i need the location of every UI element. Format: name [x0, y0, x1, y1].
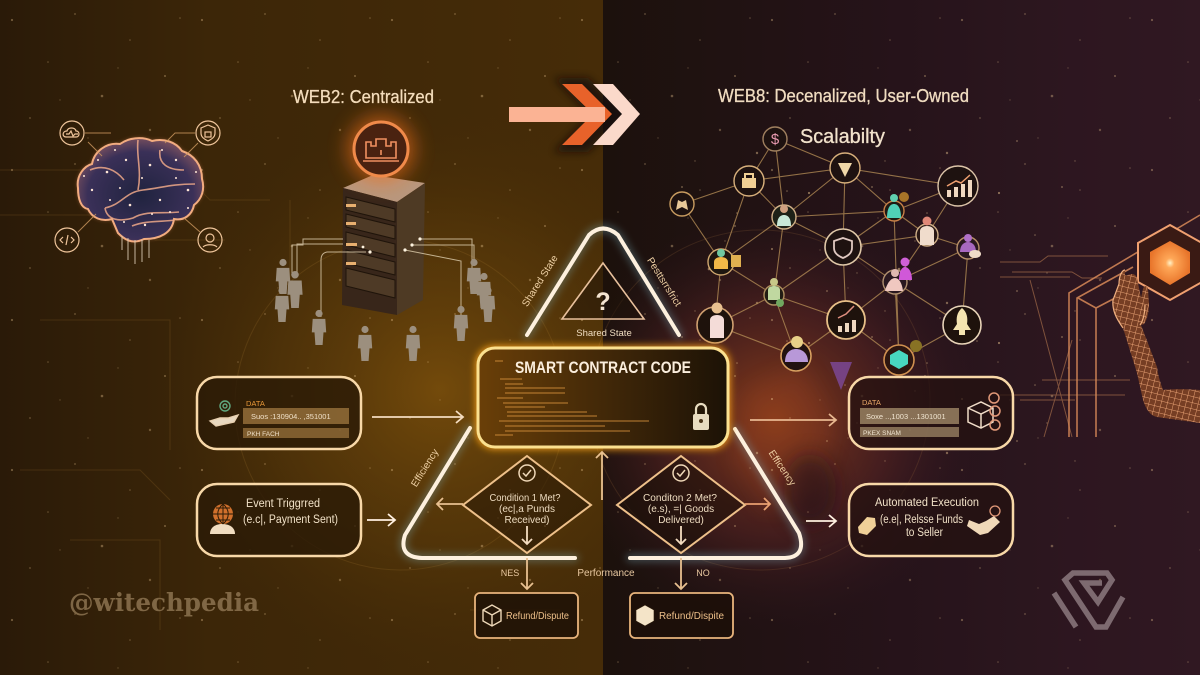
node: user lavender [781, 336, 811, 371]
illustration: central server rack [342, 175, 425, 315]
icon: hand with coin [210, 401, 238, 426]
illustration: wireframe arm and hexagon [1000, 215, 1200, 437]
node: user violet [957, 234, 981, 259]
panel: smart contract code [476, 346, 730, 449]
icon: shield lock [196, 121, 220, 145]
icon: globe user [210, 504, 235, 534]
panel: data right [849, 377, 1013, 449]
text: to seller: to Seller [906, 527, 943, 539]
watermark: handle: @witechpedia [69, 588, 259, 617]
node: currency: $ [771, 131, 780, 148]
text: refund: Refund/Dispute [506, 611, 569, 622]
field: hash [243, 428, 349, 438]
icon: gear [198, 228, 222, 252]
node: user teal [772, 205, 796, 229]
title: web3: WEB8: Decenalized, User-Owned [718, 86, 969, 106]
background: left web2 half [0, 0, 603, 675]
field: address [860, 408, 959, 424]
icon: handshake [967, 506, 1000, 535]
frame lines [1069, 215, 1200, 437]
icon: padlock [693, 404, 709, 430]
icon: check [673, 465, 689, 481]
node: eagle [670, 192, 694, 216]
network: decentralized nodes [670, 127, 981, 375]
label: no branch: NO [696, 568, 710, 578]
node: teal cube [884, 340, 922, 375]
icon: question triangle [562, 263, 644, 319]
label: shared state caption: Shared State [576, 328, 632, 339]
text: event triggered: Event Triggrred [246, 498, 320, 510]
node: currency [763, 127, 787, 151]
node: shield [825, 229, 861, 265]
node: rocket [943, 306, 981, 344]
text: payment sent: (e.c|, Payment Sent) [243, 514, 338, 526]
text: goods delivered: (e.s), =| Goods [648, 504, 714, 515]
icon: cube with tokens [968, 393, 1000, 430]
wireframe arm [1113, 270, 1200, 423]
node: user blond [697, 302, 733, 343]
brain icon links [78, 133, 200, 232]
icon: code [55, 228, 79, 252]
label: shared state: Shared State [520, 253, 561, 309]
panel: refund right [630, 593, 733, 638]
text: funds received: (ec|,a Punds [499, 504, 555, 515]
icon: check [519, 465, 535, 481]
logo: watermark mark [1054, 573, 1123, 627]
node: growth chart [938, 166, 978, 206]
node: user green [764, 278, 784, 307]
icon: question triangle: ? [595, 288, 611, 316]
field: address: Suos :130904.. ,351001 [251, 412, 331, 421]
network links [682, 139, 968, 360]
node: lock [734, 166, 764, 196]
label: data: DATA [246, 399, 265, 408]
label: yes branch: NES [501, 568, 519, 578]
field: address: Soxe ..,1003 ...1301001 [866, 412, 946, 421]
arrow: web2 to web3 chevrons [509, 78, 640, 152]
decision: condition 2 [617, 456, 745, 553]
text: delivered: Delivered) [658, 515, 704, 526]
node: user cyan [884, 192, 909, 221]
panel: refund left [475, 593, 578, 638]
text: condition 1: Condition 1 Met? [490, 493, 561, 504]
icon: coin bag [858, 517, 876, 535]
icon: cube outline [483, 605, 501, 626]
node: funnel [830, 153, 860, 183]
text: release funds: (e.e|, Relsse Funds [880, 514, 963, 526]
field: hash [860, 427, 959, 437]
label: data: DATA [862, 398, 881, 407]
text: automated execution: Automated Execution [875, 497, 979, 509]
node: users magenta [883, 258, 912, 294]
text: condition 2: Conditon 2 Met? [643, 493, 717, 504]
illustration: brain with icons [55, 121, 222, 264]
heading: smart contract code: SMART CONTRACT CODE [515, 359, 691, 377]
server side face [397, 183, 425, 315]
title: web2: WEB2: Centralized [293, 87, 434, 107]
triangle labels [409, 253, 797, 489]
icon: cube filled [636, 605, 654, 626]
brain circuit stem [122, 236, 149, 264]
field: address [243, 408, 349, 424]
panel: data left [197, 377, 361, 449]
label: efficiency left: Efficiency [409, 447, 441, 489]
icon: centralized castle badge [348, 116, 414, 182]
arrows: flow connectors [367, 411, 836, 589]
brain [78, 138, 203, 241]
text: refund: Refund/Dispite [659, 611, 724, 622]
field: hash: PKH FACH [247, 431, 280, 438]
panel: event triggered [197, 484, 361, 556]
hexagon core [1138, 225, 1200, 300]
node: user pink hat [916, 216, 938, 246]
node: user with gift [708, 249, 741, 275]
users connected to server [275, 259, 495, 361]
heading: scalability: Scalabilty [800, 126, 885, 148]
triangle: main glowing frame [403, 228, 801, 558]
code lines [495, 361, 649, 435]
label: persistence: Pesttsrrsfrict [644, 256, 683, 309]
label: efficiency right: Efficency [766, 448, 797, 488]
node: rising chart [827, 301, 865, 339]
label: performance: Performance [577, 568, 635, 579]
server top face [343, 175, 425, 202]
field: hash: PKEX SNAM [863, 430, 901, 437]
panel: automated execution [849, 484, 1013, 556]
server connection lines [292, 239, 474, 323]
circuit traces [1000, 256, 1130, 437]
icon: cloud [60, 121, 84, 145]
text: received: Received) [504, 515, 550, 526]
server front face [342, 188, 397, 315]
background: right web3 half [603, 0, 1200, 675]
decision: condition 1 [463, 456, 591, 553]
